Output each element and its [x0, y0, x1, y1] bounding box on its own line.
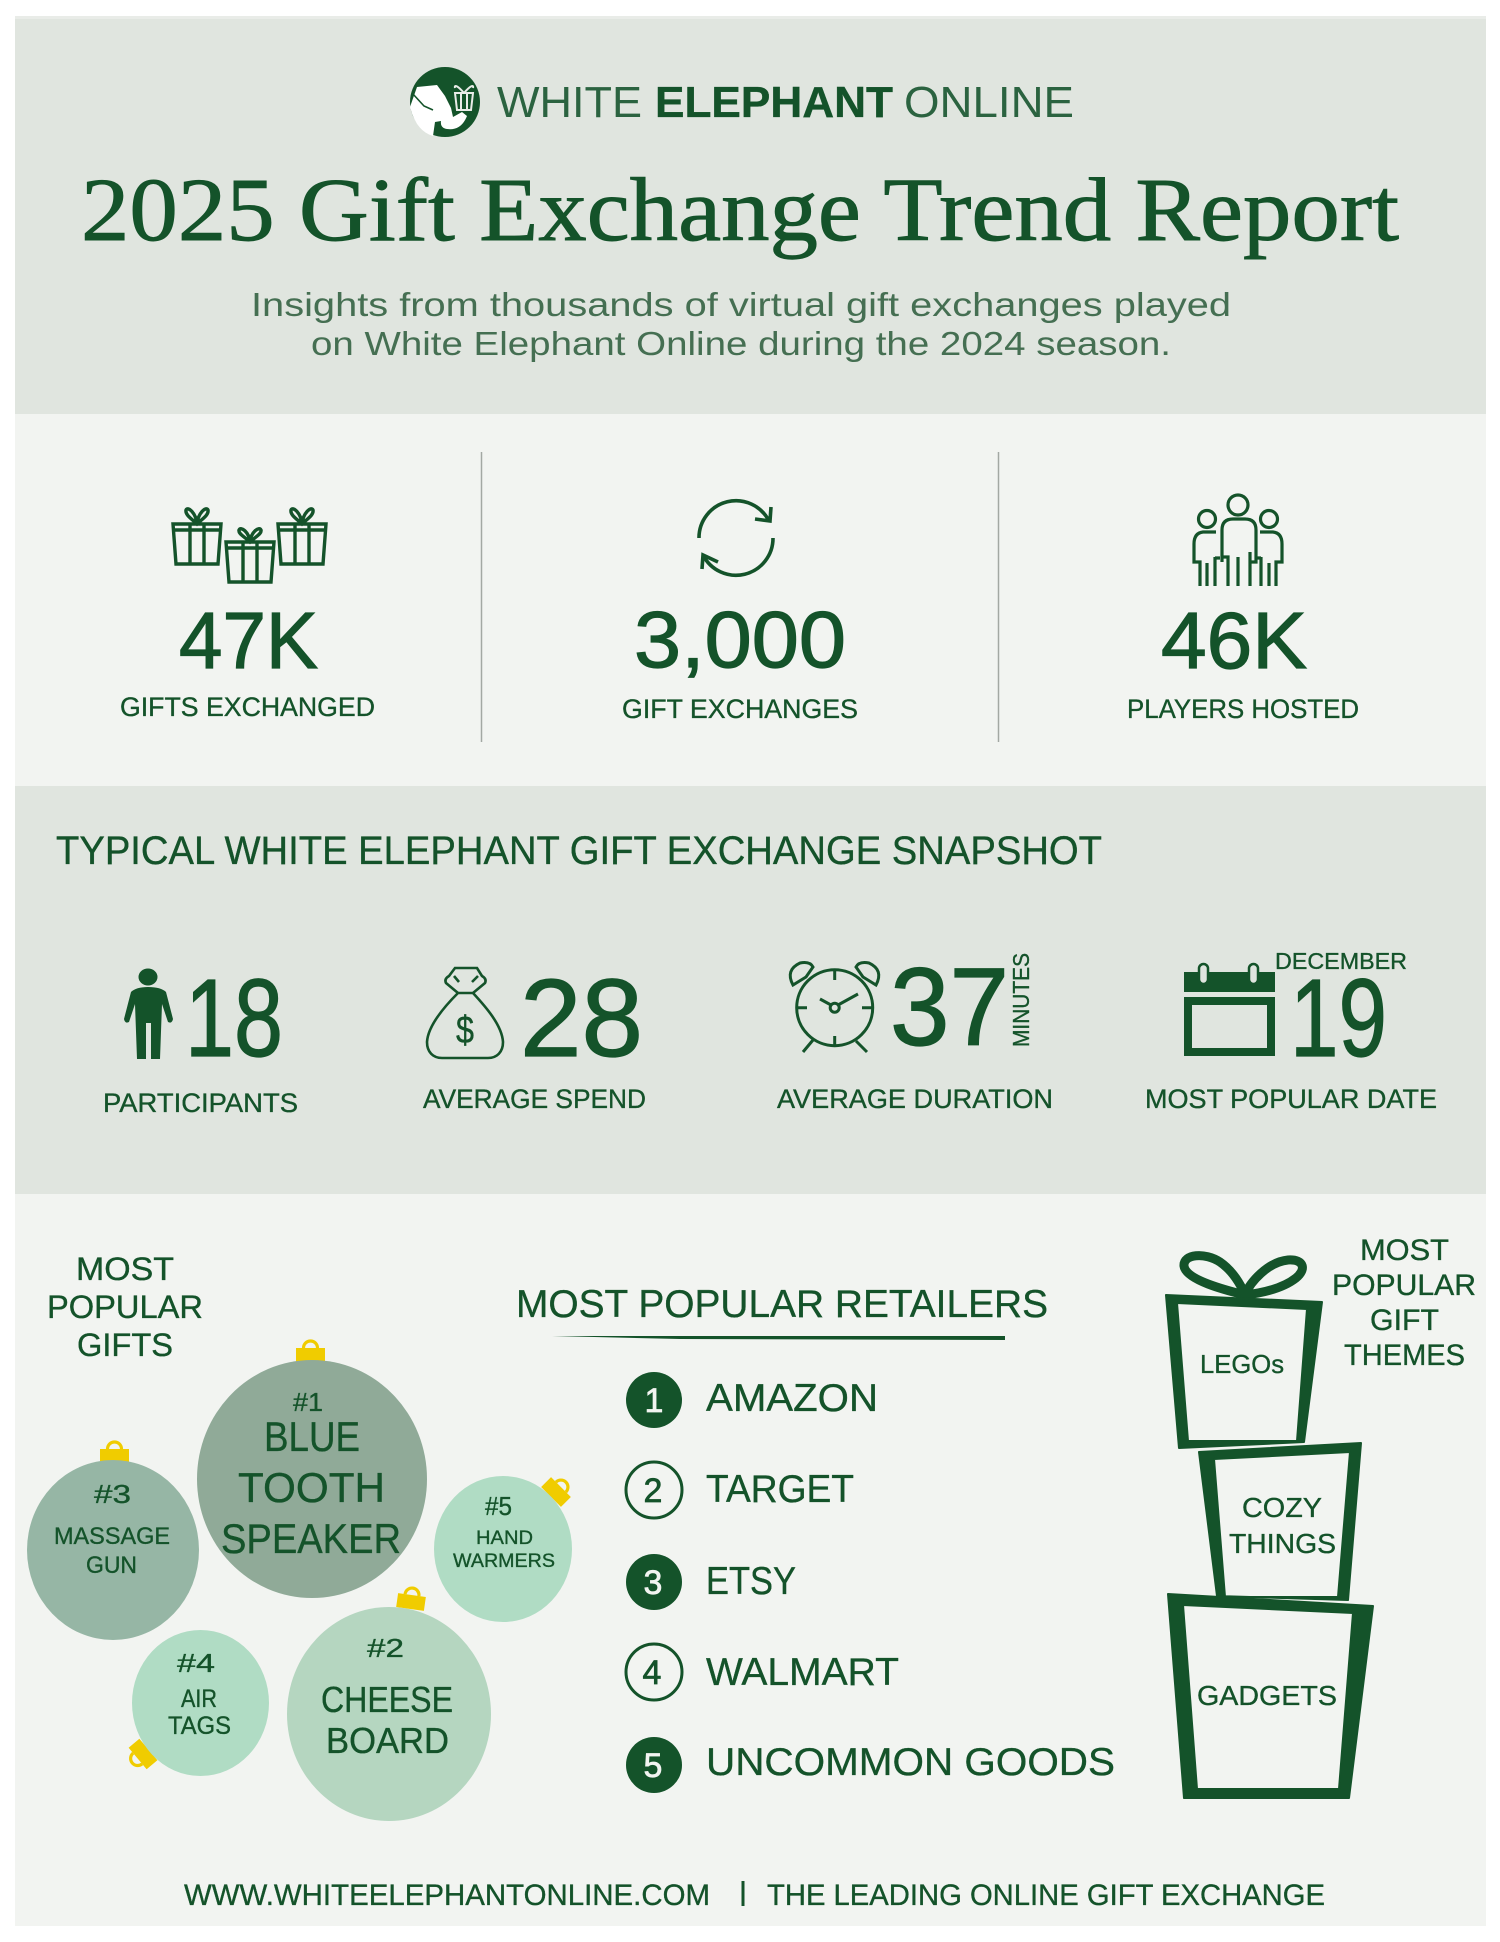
stat: gifts exchanged — [120, 509, 375, 722]
panel: typical exchange snapshot — [15, 786, 1486, 1194]
number: 46K — [1161, 596, 1307, 685]
heading: most popular gift themes: GIFT — [1370, 1304, 1439, 1337]
icon: alarm clock — [790, 962, 879, 1052]
stat: most popular date — [1145, 948, 1437, 1114]
panel: headline stats — [15, 414, 1486, 786]
heading: most popular gift themes: MOST — [1360, 1234, 1449, 1267]
subtitle: on White Elephant Online during the 2024 season. — [311, 325, 1171, 362]
subtitle: Insights from thousands of virtual gift exchanges played — [251, 286, 1231, 323]
retailer 3: ETSY — [706, 1560, 796, 1603]
label: PARTICIPANTS — [103, 1088, 298, 1118]
gift box: cozy things: THINGS — [1229, 1528, 1336, 1559]
heading: most popular gifts — [47, 1251, 203, 1363]
logo wordmark — [497, 78, 1074, 127]
ornament #5 — [434, 1472, 576, 1622]
gift box: legos — [1166, 1256, 1322, 1448]
ornament #2 — [287, 1586, 491, 1821]
retailer 5: 5 — [644, 1747, 662, 1785]
retailer 2 — [626, 1462, 854, 1518]
retailer 5: UNCOMMON GOODS — [706, 1741, 1115, 1784]
heading: most popular gifts: POPULAR — [47, 1289, 203, 1325]
retailer 4: WALMART — [706, 1651, 899, 1694]
heading: most popular gift themes: THEMES — [1344, 1339, 1465, 1372]
footer: WWW.WHITEELEPHANTONLINE.COM — [184, 1879, 710, 1912]
icon: person — [124, 968, 173, 1059]
stat: average spend — [423, 957, 646, 1114]
ornament #2: CHEESE — [321, 1679, 453, 1720]
number: 47K — [179, 596, 318, 685]
dollar sign: $ — [456, 1009, 474, 1052]
ornament #5: WARMERS — [453, 1551, 555, 1572]
gift box: gadgets: GADGETS — [1197, 1680, 1337, 1711]
ornament #2: #2 — [367, 1633, 404, 1663]
month: DECEMBER — [1275, 948, 1407, 974]
number: 3,000 — [634, 595, 846, 684]
number: 19 — [1290, 957, 1387, 1080]
ornament #1 — [197, 1341, 427, 1598]
retailer 2: TARGET — [706, 1468, 854, 1511]
retailer 1: 1 — [645, 1382, 663, 1420]
retailer 4 — [626, 1644, 899, 1700]
retailer 1 — [626, 1372, 878, 1428]
number: 28 — [520, 957, 643, 1080]
footer — [184, 1879, 1325, 1912]
footer: THE LEADING ONLINE GIFT EXCHANGE — [767, 1879, 1325, 1912]
logo — [410, 67, 1074, 137]
heading: most popular gift themes: POPULAR — [1332, 1269, 1476, 1302]
ornament #1: SPEAKER — [221, 1515, 401, 1562]
logo wordmark: ELEPHANT — [655, 78, 893, 127]
gift box: gadgets — [1168, 1594, 1373, 1798]
ornament #4: TAGS — [168, 1712, 231, 1740]
label: GIFTS EXCHANGED — [120, 692, 375, 722]
retailer 4: 4 — [643, 1654, 661, 1692]
label: GIFT EXCHANGES — [622, 694, 858, 724]
retailer 1: AMAZON — [706, 1377, 878, 1420]
icon: calendar — [1184, 964, 1275, 1052]
label: MOST POPULAR DATE — [1145, 1084, 1437, 1114]
icon: three gifts — [173, 509, 326, 582]
ornament #2: BOARD — [326, 1720, 449, 1761]
number: 18 — [185, 957, 283, 1080]
retailer 5 — [626, 1737, 1115, 1793]
number: 37 — [890, 946, 1009, 1069]
gift box: cozy things — [1199, 1443, 1361, 1600]
retailer 2: 2 — [644, 1472, 662, 1510]
ornament #4: AIR — [181, 1685, 217, 1713]
icon: three people — [1194, 495, 1282, 586]
ornament #3: GUN — [86, 1552, 137, 1579]
label: AVERAGE SPEND — [423, 1084, 646, 1114]
gift box: legos: LEGOs — [1200, 1349, 1284, 1379]
ornament #4: #4 — [177, 1648, 215, 1678]
panel: lower section — [15, 1194, 1486, 1926]
heading: most popular gift themes — [1332, 1234, 1476, 1372]
ornament #5: HAND — [476, 1528, 533, 1549]
logo wordmark: ONLINE — [904, 78, 1074, 127]
ornament #3: #3 — [94, 1479, 131, 1509]
gift box: cozy things: COZY — [1242, 1492, 1322, 1523]
retailer list — [626, 1372, 1115, 1793]
stat: average duration — [777, 946, 1053, 1114]
stat: participants — [103, 957, 298, 1118]
section heading: TYPICAL WHITE ELEPHANT GIFT EXCHANGE SNAPSHOT — [56, 829, 1102, 873]
icon: money bag — [427, 968, 503, 1058]
label: AVERAGE DURATION — [777, 1084, 1053, 1114]
heading: most popular gifts: GIFTS — [77, 1327, 173, 1363]
stacked gift boxes — [1166, 1256, 1373, 1798]
icon: refresh arrows — [699, 501, 773, 575]
ornament #3 — [27, 1442, 199, 1640]
ornament #1: #1 — [293, 1387, 323, 1417]
heading: most popular gifts: MOST — [76, 1251, 174, 1287]
ornament #1: BLUE — [264, 1413, 360, 1460]
unit: minutes: MINUTES — [1008, 953, 1034, 1047]
ornament #3: MASSAGE — [54, 1523, 170, 1550]
ornament #4 — [123, 1630, 269, 1776]
stat: gift exchanges — [622, 501, 858, 724]
heading: most popular retailers: MOST POPULAR RETAILERS — [516, 1283, 1048, 1326]
retailer 3 — [626, 1554, 796, 1610]
label: PLAYERS HOSTED — [1127, 694, 1359, 724]
panel: header — [15, 16, 1486, 414]
ornament #1: TOOTH — [238, 1464, 385, 1511]
logo wordmark: WHITE — [497, 78, 642, 127]
title: 2025 Gift Exchange Trend Report — [81, 161, 1399, 260]
retailer 3: 3 — [644, 1564, 662, 1602]
icon: elephant with gift — [410, 67, 480, 137]
ornament #5: #5 — [485, 1491, 512, 1521]
subtitle — [251, 286, 1231, 362]
stat: players hosted — [1127, 495, 1359, 724]
